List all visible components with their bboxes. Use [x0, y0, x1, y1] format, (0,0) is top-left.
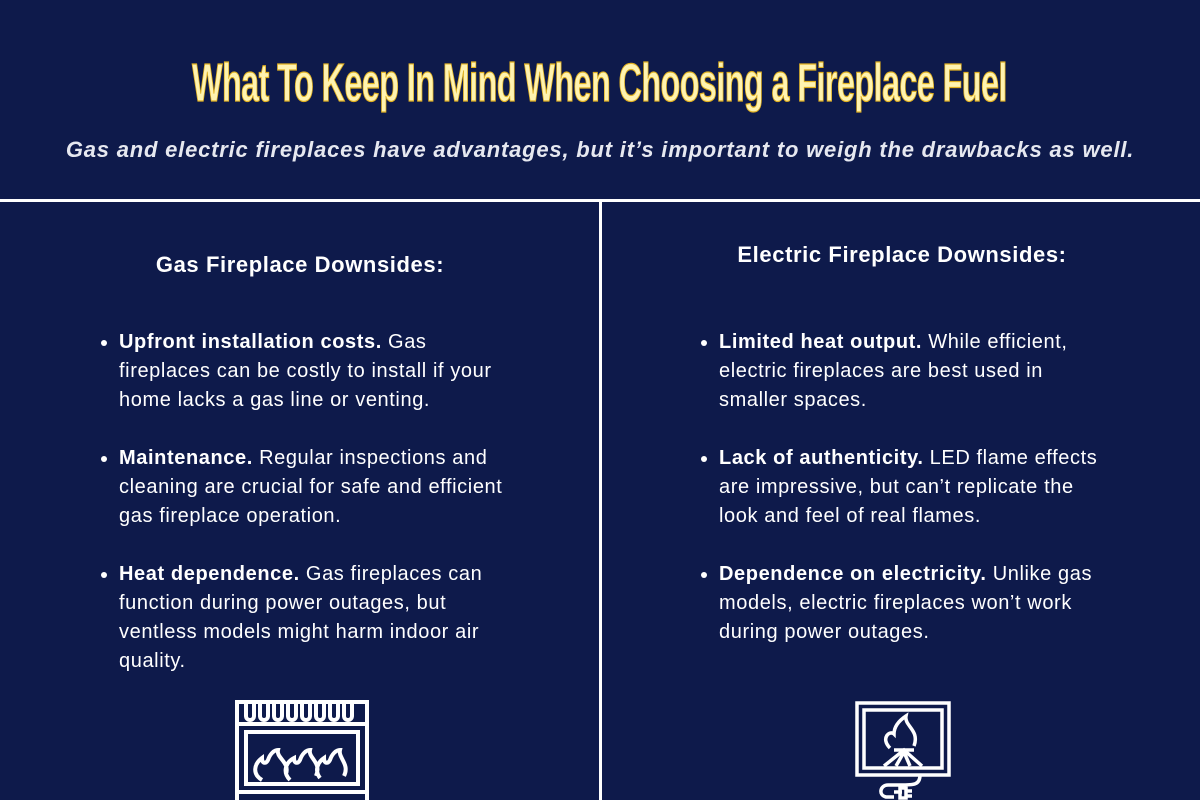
list: gas downsides: Maintenance. Regular inspections and cleaning are crucial for safe and efficient gas fireplace operation. [119, 447, 502, 527]
panel: gas [101, 252, 502, 800]
icon: electric fireplace [855, 701, 951, 800]
heading: gas: Gas Fireplace Downsides: [156, 252, 444, 277]
list: gas downsides [101, 331, 502, 672]
vertical divider [599, 200, 602, 800]
list: electric downsides [701, 331, 1097, 643]
list: gas downsides: Heat dependence. Gas fireplaces can function during power outages, but ventless models might harm indoor air quality. [119, 563, 482, 672]
list: electric downsides: Limited heat output. While efficient, electric fireplaces are best used in smaller spaces. [719, 331, 1068, 411]
list: gas downsides: Upfront installation costs. Gas fireplaces can be costly to install if your home lacks a gas line or venting. [119, 331, 492, 411]
title: What To Keep In Mind When Choosing a Fireplace Fuel [192, 53, 1007, 113]
heading: electric: Electric Fireplace Downsides: [737, 242, 1067, 267]
list: electric downsides: Dependence on electricity. Unlike gas models, electric fireplaces won’t work during power outages. [719, 563, 1092, 643]
icon: gas fireplace [235, 700, 369, 800]
subtitle: Gas and electric fireplaces have advantages, but it’s important to weigh the drawbacks as well. [66, 137, 1134, 162]
list: electric downsides: Lack of authenticity. LED flame effects are impressive, but can’t replicate the look and feel of real flames. [719, 447, 1097, 527]
panel: electric [701, 242, 1097, 800]
horizontal divider [0, 199, 1200, 202]
